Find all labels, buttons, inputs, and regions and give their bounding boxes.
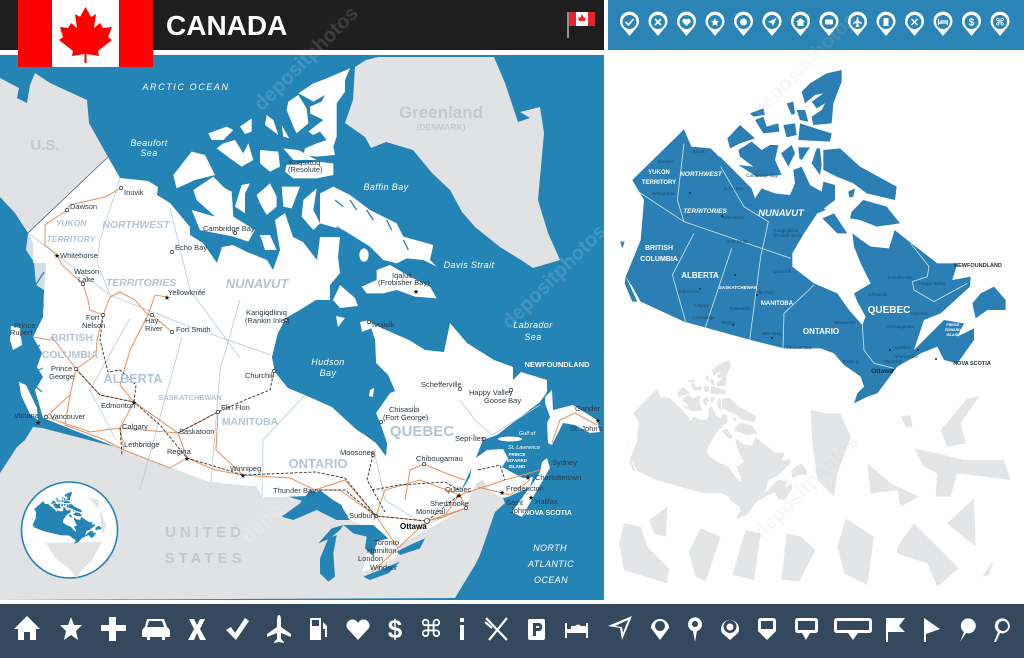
islands: Vancouver and Haida Gwaii xyxy=(10,326,38,420)
city labels: Prince xyxy=(14,321,35,330)
city labels: Whitehorse xyxy=(60,251,98,260)
inset globe xyxy=(22,482,118,578)
city labels: Québec xyxy=(895,345,912,350)
city labels: Hamilton xyxy=(367,546,397,555)
province labels: NUNAVUT xyxy=(226,276,289,291)
ocean labels: OCEAN xyxy=(534,575,568,585)
city stars: ★ xyxy=(184,455,190,463)
city stars: ★ xyxy=(595,417,601,425)
city labels: Yellowknife xyxy=(722,215,745,220)
pin discs xyxy=(622,15,1007,29)
city labels: Lake xyxy=(78,275,94,284)
city labels: Happy Valley xyxy=(469,388,513,397)
city labels: Vancouver xyxy=(50,412,86,421)
city labels: Saskatoon xyxy=(179,427,214,436)
land: Alaska xyxy=(0,73,108,233)
neighbouring country labels: Greenland xyxy=(399,103,483,122)
icon: info xyxy=(460,618,464,640)
maritime labels: Gulf of xyxy=(519,431,536,437)
city labels: Cambridge Bay xyxy=(746,173,779,178)
title: CANADA xyxy=(166,10,287,41)
neighbouring country labels: STATES xyxy=(165,550,245,567)
city labels: Saint xyxy=(506,498,524,507)
icon: fuel xyxy=(310,618,327,640)
icon: car xyxy=(142,619,170,640)
map: Canada with provinces xyxy=(620,70,1006,403)
icon: cross xyxy=(188,619,206,640)
city labels: Regina xyxy=(167,447,192,456)
icon: notched flag xyxy=(886,618,905,642)
icon: square pin xyxy=(758,618,776,640)
city markers xyxy=(44,186,513,524)
city labels xyxy=(10,158,603,572)
city labels: Chibougamau xyxy=(416,454,463,463)
city labels: Moosonee xyxy=(340,448,375,457)
icon: parking xyxy=(528,619,545,640)
province labels: ONTARIO xyxy=(803,327,839,336)
maritime labels: PRINCE xyxy=(508,452,526,457)
icon: pin small xyxy=(688,617,702,642)
province labels: YUKON xyxy=(56,218,87,228)
flag: small waving xyxy=(568,12,595,38)
city labels: Schefferville xyxy=(888,275,913,280)
neighbouring country labels: UNITED xyxy=(165,524,245,541)
city labels: Thunder Bay xyxy=(273,486,316,495)
city labels: (Fort George) xyxy=(383,413,429,422)
city labels: Hay xyxy=(145,316,159,325)
city labels: Watson xyxy=(74,267,99,276)
icon: map pin xyxy=(651,619,669,640)
road network xyxy=(33,188,597,572)
city labels: St. John's xyxy=(570,424,603,433)
province labels: NUNAVUT xyxy=(758,208,805,219)
ocean labels: NORTH xyxy=(533,543,567,553)
city labels: Kuqsittuq xyxy=(289,158,320,167)
city labels: Edmonton xyxy=(101,401,135,410)
city labels: Kangiqdliniq xyxy=(773,228,799,233)
pin bar xyxy=(608,0,1024,50)
province labels: COLUMBIA xyxy=(640,256,678,263)
city labels xyxy=(652,149,946,364)
city labels: Rupert xyxy=(10,328,33,337)
province labels: YUKON xyxy=(648,170,670,176)
ocean labels: Bay xyxy=(320,368,336,378)
outside labels: Ottawa xyxy=(871,368,893,375)
silhouette: Canada grey xyxy=(627,360,807,519)
city stars: ★ xyxy=(164,294,170,302)
city stars: ★ xyxy=(413,288,419,296)
ocean labels xyxy=(130,82,574,585)
pin icons xyxy=(620,12,1010,36)
city labels: Montréal xyxy=(884,359,902,364)
pin glyphs: $ xyxy=(969,18,975,28)
city stars: ★ xyxy=(499,489,505,497)
islands: Hudson Bay xyxy=(333,285,374,397)
islands: Arctic Archipelago xyxy=(173,68,437,298)
map panel: Canada detailed map xyxy=(0,55,604,600)
ocean labels: Hudson xyxy=(311,357,345,367)
city labels: Fort xyxy=(86,313,100,322)
city labels: Kangiqdliniq xyxy=(246,308,287,317)
city labels: London xyxy=(358,554,383,563)
land: Canadian mainland xyxy=(28,157,547,572)
ocean labels: Beaufort xyxy=(130,138,168,148)
province labels: TERRITORIES xyxy=(106,277,176,289)
city labels: Montréal xyxy=(416,507,446,516)
city labels: Sept-Îles xyxy=(455,434,485,443)
city labels: Flin Flon xyxy=(221,403,250,412)
land: United States xyxy=(0,427,505,600)
maritime labels: St. Lawrence xyxy=(508,445,540,451)
water: Hudson Bay xyxy=(272,295,400,456)
city labels: Winnipeg xyxy=(762,331,782,336)
city labels: Winnipeg xyxy=(230,464,261,473)
header bar xyxy=(0,0,604,50)
city labels: Chisasibi xyxy=(869,292,887,297)
city labels: Regina xyxy=(721,320,736,325)
province labels: QUEBEC xyxy=(868,305,910,316)
city labels: Lethbridge xyxy=(124,440,159,449)
city labels: Yellowknife xyxy=(168,288,205,297)
province labels xyxy=(640,170,961,337)
province labels: MANITOBA xyxy=(222,416,279,428)
city labels: Calgary xyxy=(122,422,148,431)
province labels: TERRITORIES xyxy=(683,208,727,215)
city labels: Happy Valley xyxy=(919,281,946,286)
neighbouring country labels: U.S. xyxy=(30,137,60,154)
icon: check xyxy=(226,618,249,640)
province labels: NORTHWEST xyxy=(102,219,171,231)
icon: magnifier pin xyxy=(994,618,1010,642)
pin glyphs xyxy=(626,17,1005,28)
city labels: Whitehorse xyxy=(652,191,676,196)
outside labels: NEWFOUNDLAND xyxy=(954,263,1002,269)
province boundaries xyxy=(636,143,967,368)
city labels: George xyxy=(49,372,74,381)
city labels: Victoria xyxy=(14,411,40,420)
city labels: Fort Smith xyxy=(727,239,749,244)
city stars: ★ xyxy=(54,252,60,260)
city labels: Charlottetown xyxy=(535,473,581,482)
water: Great Lakes xyxy=(282,490,425,582)
city labels: Toronto xyxy=(374,538,399,547)
city labels: River xyxy=(145,324,163,333)
ocean labels: Davis Strait xyxy=(444,260,495,270)
neighbouring country labels xyxy=(30,103,483,567)
city labels: Windsor xyxy=(370,563,398,572)
railway network xyxy=(76,315,505,521)
province labels: MANITOBA xyxy=(761,301,794,307)
city labels: (Frobisher Bay) xyxy=(378,278,430,287)
city labels: Halifax xyxy=(535,497,558,506)
watermark: depositphotos xyxy=(748,9,861,122)
watermark: depositphotos xyxy=(238,436,351,549)
outside labels xyxy=(871,263,1002,375)
province labels: TERRITORY xyxy=(642,180,676,186)
water: British Columbia fjords xyxy=(26,272,44,392)
maritime labels: ISLAND xyxy=(509,464,526,469)
icon: command: ⌘ xyxy=(419,615,443,643)
watermark: depositphotos xyxy=(250,3,363,116)
flag: Canada large xyxy=(18,0,153,67)
city labels: Schefferville xyxy=(421,380,462,389)
city labels: Ivujivik xyxy=(372,320,395,329)
icon: home xyxy=(14,616,40,640)
neighbouring country labels: (DENMARK) xyxy=(416,122,466,132)
land: Anticosti xyxy=(498,436,522,442)
silhouettes: provinces grey xyxy=(619,397,1011,587)
city labels: Fredericton xyxy=(506,484,544,493)
ocean labels: Baffin Bay xyxy=(363,182,409,192)
maritime labels: NEWFOUNDLAND xyxy=(524,360,590,369)
city labels: Dawson xyxy=(70,202,97,211)
city labels: Cambridge Bay xyxy=(203,224,255,233)
province labels: PRINCE xyxy=(946,323,960,327)
province labels: ISLAND xyxy=(946,333,960,337)
city labels: Inuvik xyxy=(124,188,144,197)
icon: plane xyxy=(267,615,291,643)
outside labels: NOVA SCOTIA xyxy=(953,361,991,367)
city stars: ★ xyxy=(35,419,41,427)
city labels: Echo Bay xyxy=(175,243,207,252)
icon: wide bubble pin xyxy=(834,618,872,640)
icon: target pin xyxy=(721,620,739,640)
icon: plus xyxy=(101,617,126,641)
province labels: SASKATCHEWAN xyxy=(719,285,757,290)
city stars: ★ xyxy=(240,472,246,480)
city labels: Nelson xyxy=(82,321,105,330)
province labels: BRITISH xyxy=(645,245,673,252)
icon: star xyxy=(60,617,82,640)
territorial borders xyxy=(28,178,540,525)
ocean labels: Labrador xyxy=(513,320,553,330)
water: Baffin inlets xyxy=(335,200,408,250)
land: Greenland xyxy=(345,57,560,268)
city labels: Churchill xyxy=(245,371,275,380)
province labels xyxy=(42,218,454,471)
city labels: Calgary xyxy=(693,303,710,308)
city labels: Echo Bay xyxy=(724,186,745,191)
city labels: Iqaluit xyxy=(392,271,413,280)
maritime labels xyxy=(507,360,590,517)
city stars: ★ xyxy=(528,494,534,502)
city labels: Churchill xyxy=(773,269,791,274)
land: Alaska panhandle xyxy=(26,233,46,290)
city labels: Lethbridge xyxy=(693,315,715,320)
city labels: Sudbury xyxy=(349,511,377,520)
city labels: Saskatoon xyxy=(729,306,751,311)
province labels: COLUMBIA xyxy=(42,349,99,361)
city labels: (Rankin Inlet) xyxy=(773,233,801,238)
city labels: Prince xyxy=(51,364,72,373)
city labels: Goose Bay xyxy=(484,396,521,405)
icon bar xyxy=(0,604,1024,658)
province labels: NORTHWEST xyxy=(680,171,723,178)
city labels: Chibougamau xyxy=(886,324,915,329)
icon: lollipop pin xyxy=(960,618,976,642)
province labels: EDWARD xyxy=(945,328,961,332)
watermark: depositphotos xyxy=(498,221,611,334)
city stars: ★ xyxy=(525,474,531,482)
city labels: Chisasibi xyxy=(389,405,420,414)
city labels: Thunder Bay xyxy=(786,345,813,350)
province labels: BRITISH xyxy=(51,332,93,344)
province labels: ALBERTA xyxy=(104,372,162,386)
watermark: depositphotos xyxy=(750,431,863,544)
city stars xyxy=(35,252,601,502)
watermark xyxy=(238,3,863,549)
city labels: Ottawa xyxy=(400,522,427,531)
icon: dollar: $ xyxy=(388,614,403,644)
city labels: (Rankin Inlet) xyxy=(245,316,290,325)
icon: fork and knife xyxy=(485,618,507,640)
city labels: (Resolute) xyxy=(288,165,323,174)
city labels: Sherbrooke xyxy=(894,354,918,359)
icon: heart xyxy=(346,619,370,640)
city labels: Edmonton xyxy=(679,289,700,294)
Yukon Alaska border xyxy=(28,157,108,233)
ocean labels: ARCTIC OCEAN xyxy=(141,82,230,92)
city labels: Flin Flon xyxy=(756,290,774,295)
icon: navigation xyxy=(608,616,632,640)
city labels: Sydney xyxy=(552,458,577,467)
city labels: Dawson xyxy=(658,159,675,164)
city labels: Gander xyxy=(575,404,601,413)
city stars: ★ xyxy=(131,399,137,407)
city stars: ★ xyxy=(456,492,462,500)
city labels: John xyxy=(510,506,526,515)
province labels: ALBERTA xyxy=(681,271,719,280)
city labels: Fort Smith xyxy=(176,325,211,334)
ocean labels: ATLANTIC xyxy=(527,559,574,569)
city labels: Sudbury xyxy=(842,359,860,364)
province labels: TERRITORY xyxy=(47,234,97,244)
ocean labels: Sea xyxy=(140,148,158,158)
province labels: ONTARIO xyxy=(289,456,347,471)
province labels: QUEBEC xyxy=(390,423,454,440)
icon: bubble pin xyxy=(795,618,818,640)
ocean labels: Sea xyxy=(524,332,542,342)
city labels: Inuvik xyxy=(693,149,706,154)
icon: triangle flag xyxy=(924,618,940,642)
city labels: Sept-Îles xyxy=(910,310,929,316)
icon: bed xyxy=(565,623,588,638)
maritime labels: EDWARD xyxy=(507,458,528,463)
province labels: SASKATCHEWAN xyxy=(158,393,222,402)
land: Nova Scotia xyxy=(512,458,550,517)
city labels: Québec xyxy=(445,485,472,494)
land: Newfoundland xyxy=(545,390,600,445)
city labels: Sherbrooke xyxy=(430,499,469,508)
pin glyphs: ⌘ xyxy=(995,18,1005,28)
city labels: Moosonee xyxy=(834,320,856,325)
maritime labels: NOVA SCOTIA xyxy=(524,510,572,517)
city dots xyxy=(689,192,937,371)
